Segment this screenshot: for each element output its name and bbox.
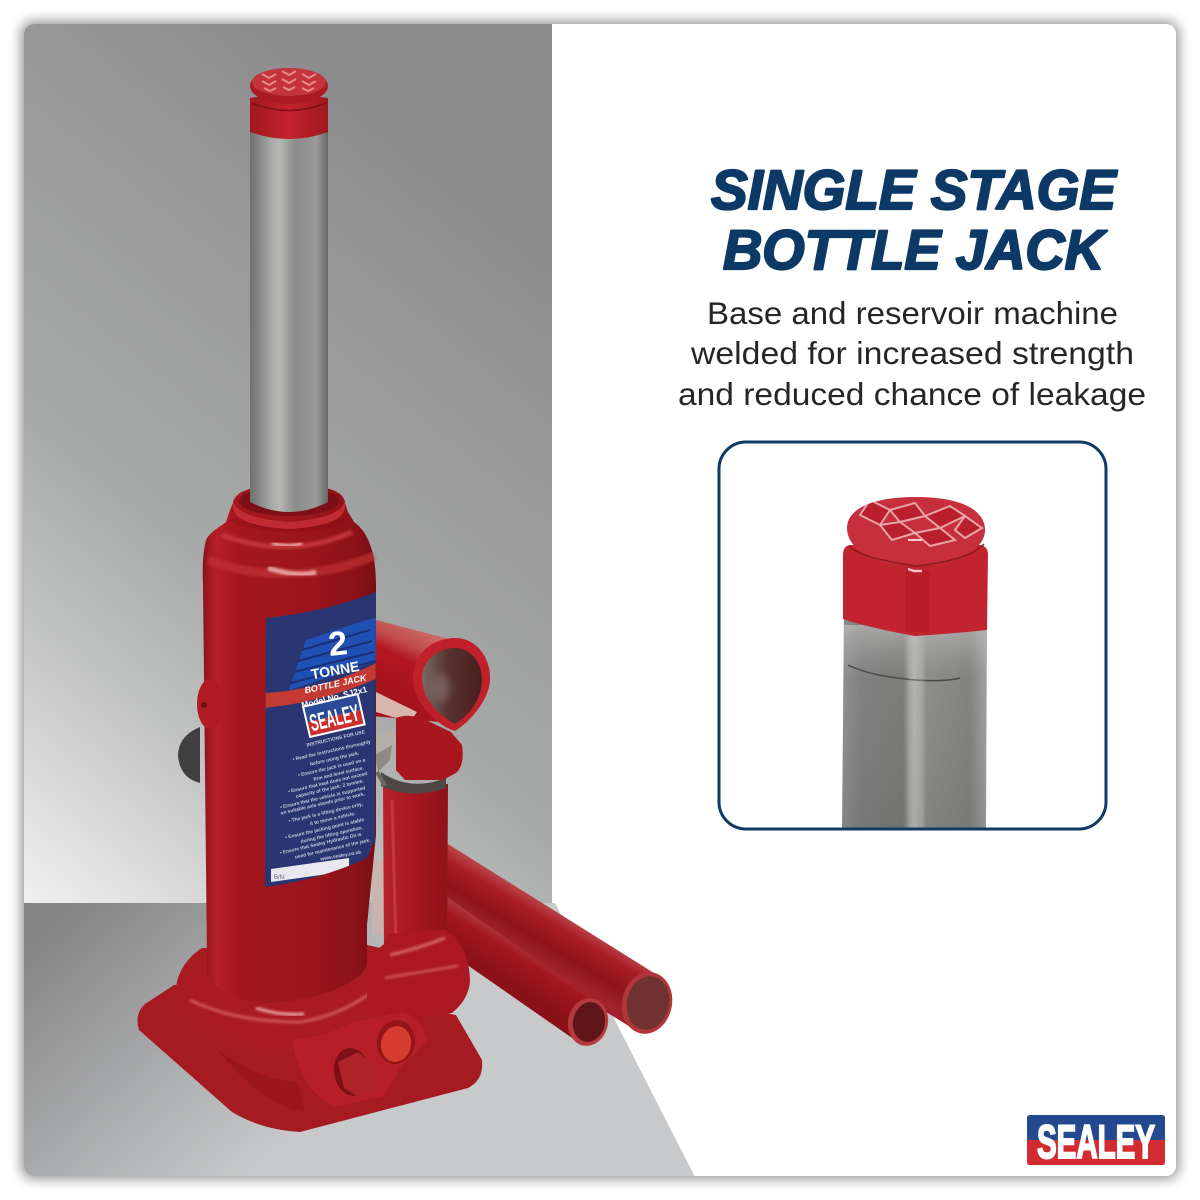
inset frame background	[719, 442, 1106, 829]
label instructions text: capacity of the jack: 2 tonnes.	[295, 778, 365, 800]
label instructions text: INSTRUCTIONS FOR USE	[306, 729, 366, 749]
label instructions text: • Ensure the jacking point is stable	[285, 817, 365, 841]
body of bottle jack	[203, 485, 376, 1003]
blanking plug on body	[197, 679, 223, 729]
label capacity text: BOTTLE JACK	[304, 672, 369, 696]
label capacity text	[301, 631, 368, 706]
label instructions text	[279, 729, 372, 863]
handle socket tube	[372, 612, 453, 722]
label instructions text: firm and level surface.	[313, 765, 365, 783]
panel: product photo background	[24, 24, 695, 1177]
release valve	[330, 1045, 376, 1099]
saddle cap	[250, 68, 328, 139]
long handle tube	[430, 839, 678, 1039]
label instructions text: • The jack is a lifting device only,	[288, 801, 364, 824]
reservoir ring casting	[176, 945, 390, 1050]
inset: detail of saddle cap	[719, 442, 1106, 830]
label SEALEY logo	[302, 693, 366, 738]
label instructions text: • Ensure that load does not exceed	[288, 771, 368, 795]
short handle tube	[440, 892, 613, 1050]
base plate	[137, 985, 482, 1132]
label instructions text: on suitable axle stands prior to work.	[280, 791, 366, 817]
pressure knob	[178, 727, 200, 783]
label capacity text: Model No. SJ2x1	[300, 684, 369, 710]
inset red collar	[843, 545, 988, 636]
logo blue half	[1027, 1115, 1165, 1140]
label instructions text: it to move a vehicle.	[309, 811, 357, 827]
label instructions text: • Ensure that the vehicle is supported	[280, 785, 366, 811]
description line 1: Base and reservoir machine	[707, 295, 1118, 331]
serial number box: B/N:	[274, 875, 286, 881]
shoulder highlights	[208, 520, 374, 930]
pump clamp and spring	[374, 729, 446, 794]
label capacity text: 2	[326, 624, 349, 664]
label background	[265, 592, 376, 887]
label instructions text: used for maintenance of the jack.	[294, 837, 372, 861]
label instructions text: during the lifting operation.	[300, 825, 364, 845]
label instructions text: www.sealey.co.uk	[319, 849, 362, 863]
logo red half	[1027, 1140, 1165, 1165]
heading line 2: BOTTLE JACK	[723, 218, 1107, 281]
red model stripe	[264, 662, 378, 708]
label instructions text: • Ensure the jack is used on a	[298, 757, 366, 779]
collar inner opening	[239, 486, 339, 516]
product label on jack	[265, 592, 376, 887]
label SEALEY logo: SEALEY	[307, 700, 362, 737]
pump cylinder	[372, 784, 448, 950]
pump base hump	[367, 930, 470, 1022]
heading	[711, 158, 1118, 281]
striped blue graphic	[289, 618, 376, 690]
inset steel ram	[842, 610, 987, 830]
floor surface	[24, 903, 695, 1177]
inset saddle pad	[847, 497, 985, 566]
SEALEY logo	[1027, 1115, 1165, 1168]
label capacity text: TONNE	[310, 658, 361, 682]
valve block	[218, 1008, 428, 1112]
label instructions text: before using the jack.	[310, 750, 361, 768]
filler plug	[373, 1017, 419, 1067]
description text	[678, 295, 1146, 412]
label instructions text: • Ensure that Sealey Hydraulic Oil is	[279, 832, 363, 856]
description line 2: welded for increased strength	[690, 335, 1134, 371]
label instructions text: • Read the instructions thoroughly	[292, 739, 372, 763]
wall backdrop	[24, 24, 552, 904]
description line 3: and reduced chance of leakage	[678, 376, 1146, 412]
socket ring and lug	[396, 638, 490, 780]
illustration: bottle jack	[137, 68, 678, 1132]
hydraulic ram	[233, 110, 345, 529]
inset frame border	[719, 442, 1106, 829]
inset pad tread pattern	[860, 500, 982, 546]
serial number box	[271, 858, 349, 882]
heading line 1: SINGLE STAGE	[711, 158, 1118, 221]
